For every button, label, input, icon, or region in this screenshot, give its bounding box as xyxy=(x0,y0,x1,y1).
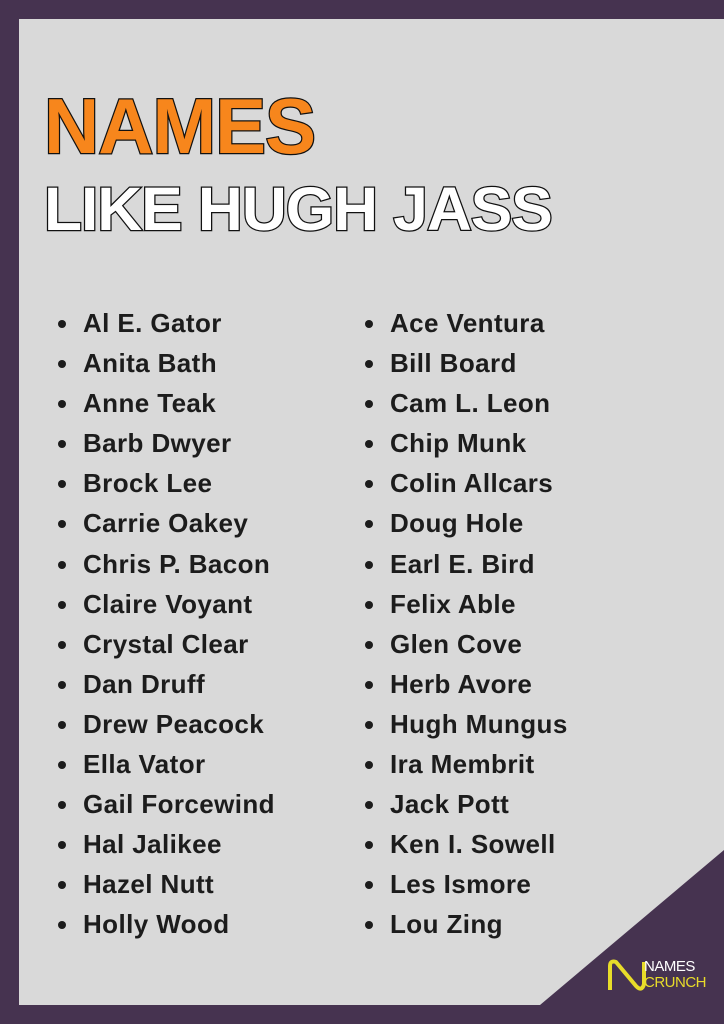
logo text: CRUNCH xyxy=(644,974,706,991)
logo: names crunch xyxy=(608,958,706,991)
list: column 2: Les Ismore xyxy=(390,869,531,899)
list: column 1: Brock Lee xyxy=(83,468,212,498)
list: column 1: Holly Wood xyxy=(83,909,230,939)
list: column 2 xyxy=(365,308,568,939)
list: column 2: Ace Ventura xyxy=(390,308,545,338)
list: column 1: Dan Druff xyxy=(83,669,205,699)
list: column 1: Hazel Nutt xyxy=(83,869,214,899)
list: column 1: Chris P. Bacon xyxy=(83,549,270,579)
logo text xyxy=(644,958,706,991)
icon: N logo xyxy=(608,960,646,991)
list: column 2: Colin Allcars xyxy=(390,468,553,498)
list: column 2: Doug Hole xyxy=(390,508,524,538)
list: column 1: Hal Jalikee xyxy=(83,829,222,859)
title: LIKE HUGH JASS: LIKE HUGH JASS xyxy=(44,175,552,243)
list: column 2: Ken I. Sowell xyxy=(390,829,556,859)
title: NAMES: NAMES xyxy=(44,82,315,170)
list: column 1: Claire Voyant xyxy=(83,589,252,619)
list: column 1: Crystal Clear xyxy=(83,629,249,659)
list: column 2: Felix Able xyxy=(390,589,516,619)
list: column 1: Gail Forcewind xyxy=(83,789,275,819)
list: column 2: Lou Zing xyxy=(390,909,503,939)
list: column 1 xyxy=(58,308,275,939)
list: column 2: Chip Munk xyxy=(390,428,526,458)
list: column 2: Jack Pott xyxy=(390,789,509,819)
list: column 2: Glen Cove xyxy=(390,629,522,659)
list: column 2: Hugh Mungus xyxy=(390,709,568,739)
list: column 2: Ira Membrit xyxy=(390,749,535,779)
list: column 1: Drew Peacock xyxy=(83,709,264,739)
list: column 1: Anita Bath xyxy=(83,348,217,378)
list: column 2: Earl E. Bird xyxy=(390,549,535,579)
logo text: NAMES xyxy=(644,958,695,975)
list: column 2: Cam L. Leon xyxy=(390,388,550,418)
list: column 1: Anne Teak xyxy=(83,388,216,418)
list: column 1: Ella Vator xyxy=(83,749,206,779)
list: column 2: Herb Avore xyxy=(390,669,532,699)
list: column 1: Al E. Gator xyxy=(83,308,222,338)
list: column 1: Carrie Oakey xyxy=(83,508,248,538)
list: column 2: Bill Board xyxy=(390,348,517,378)
list: column 1: Barb Dwyer xyxy=(83,428,232,458)
